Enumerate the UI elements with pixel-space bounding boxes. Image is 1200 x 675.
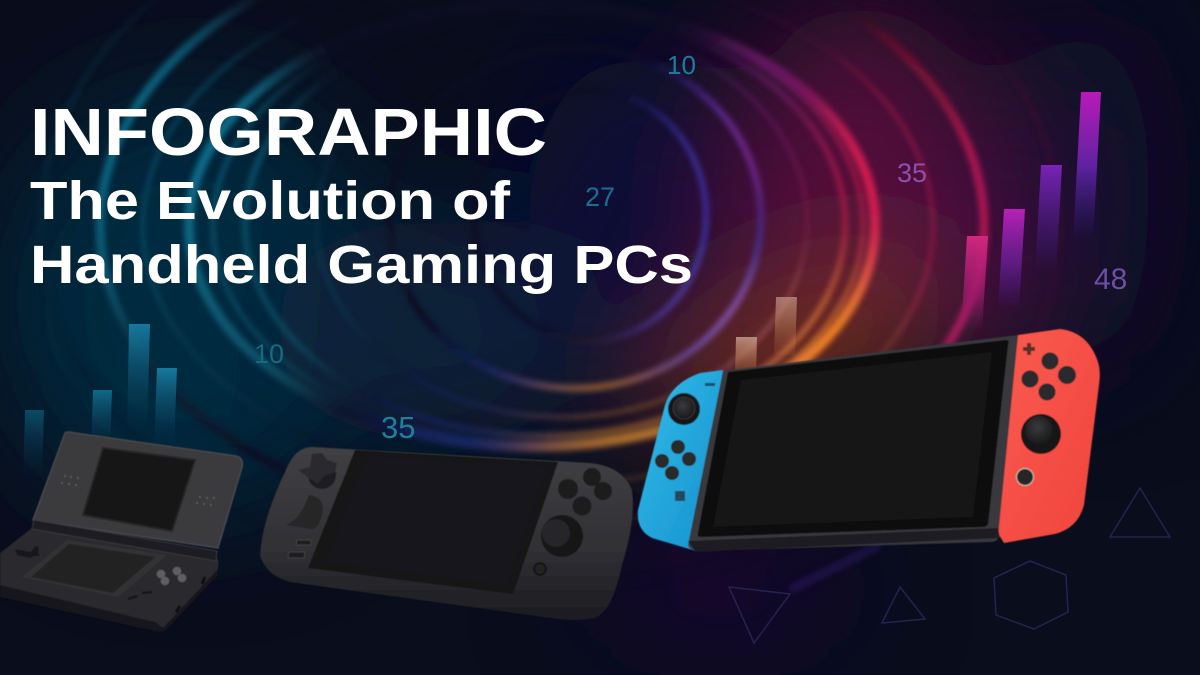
lid	[33, 432, 242, 548]
blue controls	[668, 393, 700, 425]
title	[30, 95, 693, 295]
title: Handheld Gaming PCs	[30, 235, 693, 295]
upper screen	[83, 448, 195, 531]
floating numbers: 35	[381, 410, 415, 445]
right red controller	[996, 329, 1100, 543]
device: clamshell handheld	[0, 432, 242, 632]
thumbstick	[541, 515, 583, 557]
decorative outline shapes	[729, 488, 1170, 643]
bar chart: left teal bars	[23, 324, 177, 480]
screen	[308, 450, 558, 594]
title: The Evolution of	[30, 171, 511, 231]
touch screen	[22, 540, 167, 597]
floating numbers: 27	[585, 182, 615, 212]
face buttons	[558, 468, 612, 516]
hinge	[32, 520, 217, 561]
body	[260, 447, 633, 620]
bar chart: right purple bars	[961, 92, 1101, 331]
floating numbers: 10	[667, 50, 696, 80]
screen	[713, 352, 992, 527]
red controls	[1023, 343, 1035, 355]
base	[0, 528, 218, 629]
title: INFOGRAPHIC	[30, 95, 547, 170]
faint streak under console	[790, 545, 880, 590]
speakers	[61, 475, 215, 506]
screen bezel	[698, 340, 1009, 537]
floating numbers	[254, 50, 1127, 445]
buttons	[157, 567, 186, 585]
colour field seen through the rings	[66, 0, 1053, 520]
d-pad	[15, 546, 40, 558]
bar chart: centre orange bars	[735, 297, 797, 377]
d-pad	[308, 461, 336, 489]
small round button	[534, 563, 546, 575]
left blue controller	[638, 370, 723, 551]
floating numbers: 48	[1094, 263, 1127, 296]
floating numbers: 10	[254, 339, 284, 369]
floating numbers: 35	[897, 158, 927, 188]
small buttons	[288, 540, 311, 558]
console body	[688, 335, 1018, 551]
device: colourful hybrid console	[638, 329, 1100, 552]
trackpad	[286, 495, 323, 529]
device: dark handheld PC	[260, 447, 633, 620]
